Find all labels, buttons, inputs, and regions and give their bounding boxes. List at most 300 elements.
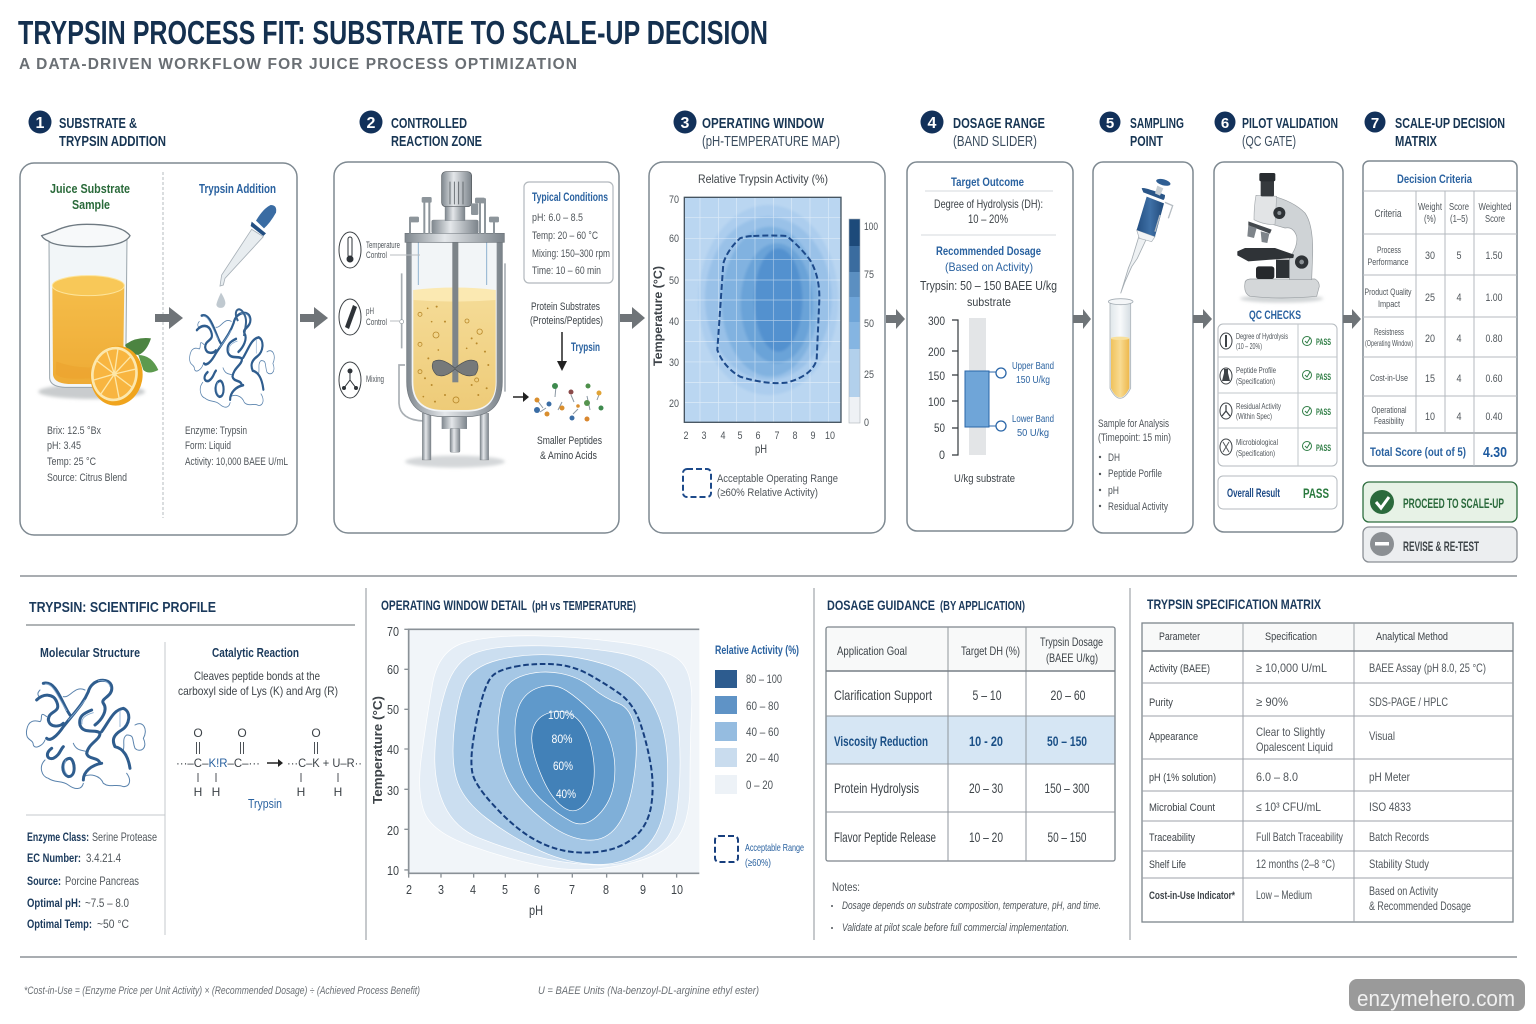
- enzyme facts: 3.4.21.4: [86, 851, 121, 865]
- spec row: cost-in-use indicator: Cost-in-Use Indicator*: [1149, 890, 1236, 902]
- icon: stirred reactor: [399, 172, 505, 468]
- juice substrate heading: [50, 181, 130, 212]
- matrix row: process performance: 5: [1456, 250, 1462, 262]
- legend: acceptable range: (≥60%): [745, 857, 771, 869]
- juice substrate heading: Sample: [72, 197, 110, 212]
- sample measurement list: DH: [1108, 452, 1120, 464]
- legend: relative activity: Relative Activity (%): [715, 643, 799, 657]
- spec row: appearance: Clear to Slightly: [1256, 725, 1325, 739]
- color bar legend: 50: [864, 318, 874, 330]
- matrix row: process performance: Performance: [1368, 257, 1408, 267]
- specification header row: Specification: [1265, 631, 1317, 643]
- operating window detail heading: OPERATING WINDOW DETAIL: [381, 597, 527, 613]
- spec row: shelf life: Stability Study: [1369, 857, 1429, 871]
- enzyme facts: Enzyme Class:: [27, 830, 89, 844]
- spec row: microbial count: [1149, 800, 1411, 814]
- spec row: shelf life: 12 months (2–8 °C): [1256, 857, 1335, 871]
- button: revise and re-test: REVISE & RE-TEST: [1403, 538, 1479, 554]
- y axis labels: 40: [387, 742, 399, 757]
- sample measurement list: [1099, 452, 1168, 513]
- button: proceed to scale-up: [1363, 482, 1517, 522]
- arrow: step 5 to 6: [1193, 309, 1212, 329]
- matrix row: product quality: Impact: [1378, 299, 1400, 309]
- dosage band slider: 200: [928, 345, 945, 359]
- reaction scheme: Trypsin: [248, 797, 282, 811]
- QC row: degree of hydrolysis: Degree of Hydrolysis: [1236, 332, 1288, 341]
- band labels: 150 U/kg: [1016, 375, 1050, 386]
- matrix row: product quality: [1364, 287, 1502, 309]
- notes: Notes:: [832, 880, 860, 894]
- x axis labels: 2: [406, 882, 412, 897]
- x axis labels: [684, 430, 835, 456]
- dosage row: protein hydrolysis: [834, 780, 1090, 796]
- color bar legend: 75: [864, 269, 874, 281]
- matrix row: resistance: 20: [1425, 333, 1435, 345]
- dosage row: flavor peptide release: 10 – 20: [969, 829, 1003, 845]
- spec row: purity: SDS-PAGE / HPLC: [1369, 695, 1448, 709]
- matrix row: operational feasibility: [1372, 405, 1502, 426]
- matrix row: operational feasibility: Feasibility: [1374, 416, 1404, 426]
- enzyme attributes text: Form: Liquid: [185, 440, 231, 452]
- y axis labels: 60: [387, 662, 399, 677]
- x axis labels: 3: [702, 430, 706, 442]
- spec row: traceability: Traceability: [1149, 832, 1195, 844]
- x axis labels: 9: [640, 882, 646, 897]
- target outcome text: [921, 175, 1056, 235]
- molecular structure heading: Molecular Structure: [40, 645, 140, 660]
- color bar legend: 25: [864, 369, 874, 381]
- spec row: activity: [1149, 661, 1486, 675]
- spec row: purity: Purity: [1149, 697, 1173, 709]
- matrix header row: (1–5): [1450, 214, 1468, 225]
- reaction scheme: O: [237, 726, 247, 740]
- legend: acceptable range: [715, 836, 804, 869]
- catalytic reaction heading: Catalytic Reaction: [212, 645, 299, 660]
- matrix row: operational feasibility: 4: [1456, 411, 1462, 423]
- arrow: step 3 to 4: [886, 309, 905, 329]
- reaction scheme: O: [311, 726, 321, 740]
- matrix row: process performance: 1.50: [1486, 250, 1502, 262]
- notes: Validate at pilot scale before full commercial implementation.: [842, 922, 1069, 934]
- QC row: residual activity: (Within Spec): [1236, 412, 1272, 421]
- typical conditions box: Mixing: 150–300 rpm: [532, 248, 610, 260]
- spec row: pH: pH (1% solution): [1149, 772, 1216, 784]
- recommended dosage text: Trypsin: 50 – 150 BAEE U/kg: [920, 278, 1057, 293]
- matrix row: resistance: 4: [1456, 333, 1462, 345]
- step 6 heading: 6: [1221, 115, 1229, 132]
- y axis labels: Temperature (°C): [370, 696, 385, 804]
- step 7 heading: 7: [1371, 115, 1379, 132]
- panel: scientific profile: [26, 599, 362, 935]
- reaction scheme: [176, 726, 362, 811]
- typical conditions box: pH: 6.0 – 8.5: [532, 212, 583, 224]
- step 1 heading: [28, 110, 166, 150]
- step 2 heading: CONTROLLED: [391, 115, 467, 132]
- y axis labels: 40: [669, 316, 679, 328]
- x axis labels: 3: [438, 882, 444, 897]
- enzyme facts: Serine Protease: [92, 830, 157, 844]
- icon: molecular ribbon: [26, 680, 145, 789]
- icon: pH control: [339, 299, 400, 335]
- spec row: cost-in-use indicator: & Recommended Dosage: [1369, 899, 1471, 913]
- matrix row: product quality: 4: [1456, 292, 1462, 304]
- matrix header row: (%): [1424, 214, 1436, 225]
- juice attributes text: [47, 425, 127, 484]
- matrix row: resistance: (Operating Window): [1365, 339, 1413, 348]
- icon: temperature control: [339, 232, 420, 268]
- title: TRYPSIN PROCESS FIT: SUBSTRATE TO SCALE-UP DECISION: [18, 14, 768, 51]
- y axis labels: 20: [669, 398, 679, 410]
- reaction scheme: ···C–K + U–R··: [287, 756, 362, 770]
- dosage row: viscosity reduction highlighted: [834, 733, 1087, 749]
- matrix row: process performance: Process: [1377, 245, 1401, 255]
- y axis labels: 70: [387, 624, 399, 639]
- sample text: [1098, 418, 1171, 444]
- y axis labels: 10: [387, 863, 399, 878]
- panel: sampling point: [1093, 162, 1193, 533]
- sample measurement list: Peptide Porfile: [1108, 468, 1162, 480]
- spec row: activity: Activity (BAEE): [1149, 663, 1210, 675]
- x axis labels: 6: [756, 430, 760, 442]
- dosage header row: Trypsin Dosage: [1040, 635, 1103, 649]
- enzyme facts: Optimal pH:: [27, 896, 81, 910]
- x axis labels: 9: [810, 430, 816, 442]
- smaller peptides label: [537, 435, 602, 462]
- notes: [831, 880, 1101, 934]
- typical conditions box: [524, 182, 613, 283]
- spec row: traceability: Full Batch Traceability: [1256, 830, 1343, 844]
- icon: pH control: pH: [366, 306, 374, 316]
- step 5 heading: 5: [1106, 115, 1114, 132]
- QC row: peptide profile: (Specification): [1236, 377, 1275, 386]
- enzyme attributes text: Enzyme: Trypsin: [185, 425, 247, 437]
- enzyme attributes text: [185, 425, 288, 468]
- matrix header row: Criteria: [1374, 208, 1402, 220]
- matrix row: resistance: Resistness: [1374, 327, 1404, 337]
- smaller peptides label: Smaller Peptides: [537, 435, 602, 447]
- contour labels: [548, 708, 576, 801]
- dosage row: clarification support: 5 – 10: [972, 687, 1002, 703]
- matrix row: product quality: Product Quality: [1364, 287, 1412, 297]
- recommended dosage text: (Based on Activity): [945, 260, 1033, 274]
- trypsin addition heading: Trypsin Addition: [199, 181, 276, 196]
- spec row: pH: pH Meter: [1369, 770, 1410, 784]
- y axis labels: Temperature (°C): [653, 266, 665, 366]
- icon: smaller peptides: [534, 383, 604, 422]
- QC checks table: [1218, 324, 1337, 466]
- spec row: microbial count: Microbial Count: [1149, 802, 1215, 814]
- step 2 heading: [360, 110, 482, 150]
- step 1 heading: 1: [36, 115, 45, 132]
- color bar legend: 100: [864, 221, 878, 233]
- enzyme facts: EC Number:: [27, 851, 81, 865]
- enzyme facts: ~50 °C: [97, 917, 129, 931]
- matrix row: resistance: 0.80: [1486, 333, 1502, 345]
- icon: dropper: [216, 205, 276, 308]
- panel: specification matrix: [1142, 596, 1513, 922]
- spec row: cost-in-use indicator: Low – Medium: [1256, 888, 1312, 902]
- panel: operating window: [649, 162, 885, 533]
- step 3 heading: (pH-TEMPERATURE MAP): [702, 133, 840, 150]
- reaction scheme: ···–C–K!R–C–···: [176, 756, 260, 770]
- QC row: microbiological: (Specification): [1236, 449, 1275, 458]
- dosage row: flavor peptide release: [834, 829, 1087, 845]
- contour labels: 100%: [548, 708, 574, 722]
- icon: temperature control: Control: [366, 250, 387, 260]
- reaction scheme: H: [194, 785, 202, 799]
- spec row: pH: 6.0 – 8.0: [1256, 770, 1298, 784]
- spec row: traceability: Batch Records: [1369, 830, 1429, 844]
- QC checks heading: QC CHECKS: [1249, 310, 1301, 322]
- spec row: purity: [1149, 695, 1448, 709]
- decision criteria heading: Decision Criteria: [1397, 172, 1472, 186]
- x axis labels: 5: [738, 430, 742, 442]
- dosage row: viscosity reduction highlighted: Viscosity Reduction: [834, 733, 928, 749]
- enzyme facts: Optimal Temp:: [27, 917, 92, 931]
- spec row: cost-in-use indicator: [1149, 884, 1471, 913]
- unit label: U/kg substrate: [954, 473, 1015, 485]
- arrow: trypsin conversion: Trypsin: [571, 340, 600, 354]
- contour labels: 60%: [553, 759, 573, 773]
- step 1 heading: SUBSTRATE &: [59, 115, 137, 132]
- icon: temperature control: Temperature: [366, 240, 400, 250]
- legend: relative activity: [715, 643, 799, 794]
- matrix row: product quality: 25: [1425, 292, 1435, 304]
- legend: relative activity: 80 – 100: [746, 672, 782, 686]
- color bar legend: [849, 219, 878, 429]
- step 5 heading: POINT: [1130, 133, 1163, 150]
- step 2 heading: REACTION ZONE: [391, 133, 482, 150]
- step 4 heading: [920, 110, 1045, 150]
- x axis labels: 7: [774, 430, 780, 442]
- dosage band slider: 100: [928, 395, 945, 409]
- dosage header row: Application Goal: [837, 644, 907, 658]
- footnote: units: U = BAEE Units (Na-benzoyl-DL-arginine ethyl ester): [538, 985, 759, 997]
- target outcome text: 10 – 20%: [968, 212, 1008, 226]
- step 7 heading: [1364, 112, 1505, 150]
- total score: 4.30: [1483, 444, 1507, 461]
- matrix header row: Score: [1485, 214, 1505, 225]
- icon: trypsin protein ribbon: [190, 309, 274, 407]
- x axis labels: [406, 882, 683, 918]
- legend: acceptable operating range: Acceptable Operating Range: [717, 473, 838, 485]
- typical conditions box: Temp: 20 – 60 °C: [532, 230, 598, 242]
- recommended dosage text: Recommended Dosage: [936, 244, 1041, 258]
- band labels: 50 U/kg: [1017, 428, 1049, 439]
- matrix header row: Score: [1449, 202, 1469, 213]
- dosage row: clarification support: 20 – 60: [1050, 687, 1086, 703]
- matrix row: cost-in-use: 4: [1456, 373, 1462, 385]
- protein substrates label: [530, 301, 603, 327]
- step 6 heading: (QC GATE): [1242, 133, 1296, 150]
- sample text: (Timepoint: 15 min): [1098, 432, 1171, 444]
- step 3 heading: OPERATING WINDOW: [702, 115, 825, 132]
- spec row: traceability: [1149, 830, 1429, 844]
- x axis labels: 10: [671, 882, 683, 897]
- specification table: [1142, 623, 1513, 922]
- spec row: cost-in-use indicator: Based on Activity: [1369, 884, 1438, 898]
- reaction scheme: H: [297, 785, 305, 799]
- subtitle: A DATA-DRIVEN WORKFLOW FOR JUICE PROCESS OPTIMIZATION: [19, 56, 577, 73]
- juice attributes text: Source: Citrus Blend: [47, 472, 127, 484]
- legend: acceptable range: Acceptable Range: [745, 842, 804, 854]
- x axis labels: 7: [569, 882, 575, 897]
- QC row: microbiological: Microbiological: [1236, 438, 1278, 447]
- target outcome text: Target Outcome: [951, 175, 1024, 189]
- matrix row: process performance: [1368, 245, 1502, 267]
- step 5 heading: [1100, 112, 1184, 150]
- sample measurement list: pH: [1108, 485, 1119, 497]
- step 6 heading: PILOT VALIDATION: [1242, 115, 1338, 132]
- spec row: activity: ≥ 10,000 U/mL: [1256, 661, 1327, 675]
- arrow: step 2 to 3: [620, 307, 645, 329]
- specification heading: TRYPSIN SPECIFICATION MATRIX: [1147, 596, 1322, 612]
- y axis labels: [653, 194, 679, 410]
- y axis labels: 30: [387, 783, 399, 798]
- legend: relative activity: 60 – 80: [746, 699, 779, 713]
- target outcome text: Degree of Hydrolysis (DH):: [934, 197, 1043, 211]
- icon: mixing: [339, 362, 384, 398]
- y axis labels: 50: [387, 702, 399, 717]
- matrix row: operational feasibility: 10: [1425, 411, 1435, 423]
- dosage band slider: 150: [928, 369, 945, 383]
- spec row: appearance: Appearance: [1149, 731, 1198, 743]
- specification header row: Parameter: [1159, 631, 1200, 643]
- catalytic reaction description: Cleaves peptide bonds at the: [194, 669, 320, 683]
- sample text: Sample for Analysis: [1098, 418, 1169, 430]
- enzyme facts: ~7.5 – 8.0: [85, 896, 129, 910]
- QC row: residual activity: PASS: [1316, 407, 1331, 418]
- icon: test tube: [1108, 299, 1133, 398]
- spec row: shelf life: [1149, 857, 1429, 871]
- QC row: peptide profile: [1220, 366, 1331, 386]
- icon: mixing: Mixing: [366, 374, 384, 384]
- panel: substrate and trypsin addition: [20, 163, 297, 535]
- QC row: microbiological: [1220, 438, 1331, 458]
- band labels: Lower Band: [1012, 414, 1054, 425]
- scientific profile heading: TRYPSIN: SCIENTIFIC PROFILE: [29, 599, 216, 616]
- enzyme facts: [27, 830, 157, 931]
- protein substrates label: Protein Substrates: [531, 301, 600, 313]
- matrix row: cost-in-use: 0.60: [1486, 373, 1502, 385]
- arrow: substrate to trypsin: [155, 307, 183, 329]
- button: revise and re-test: [1363, 527, 1517, 562]
- y axis labels: 70: [669, 194, 679, 206]
- juice attributes text: pH: 3.45: [47, 440, 81, 452]
- panel: dosage guidance: [826, 597, 1115, 934]
- matrix row: resistance: [1365, 327, 1502, 348]
- legend: acceptable operating range: (≥60% Relative Activity): [717, 487, 818, 499]
- step 4 heading: DOSAGE RANGE: [953, 115, 1045, 132]
- matrix row: operational feasibility: 0.40: [1486, 411, 1502, 423]
- x axis labels: 2: [684, 430, 688, 442]
- matrix row: cost-in-use: Cost-in-Use: [1370, 373, 1408, 383]
- y axis labels: 50: [669, 275, 679, 287]
- matrix row: cost-in-use: [1370, 373, 1502, 385]
- panel: decision matrix: [1363, 161, 1517, 466]
- arrow: reactor to peptides: [513, 392, 529, 402]
- matrix row: product quality: 1.00: [1486, 292, 1502, 304]
- step 2 heading: 2: [367, 115, 376, 132]
- x axis labels: 6: [534, 882, 540, 897]
- contour chart: [404, 629, 699, 878]
- dosage band slider: [928, 314, 1006, 462]
- dosage row: clarification support: Clarification Support: [834, 687, 932, 703]
- protein substrates label: (Proteins/Peptides): [530, 315, 603, 327]
- overall result: Overall Result: [1227, 488, 1280, 500]
- chart title: Relative Trypsin Activity (%): [698, 172, 828, 186]
- color bar legend: 0: [864, 417, 869, 429]
- step 3 heading: 3: [681, 115, 690, 132]
- notes: Dosage depends on substrate composition, temperature, pH, and time.: [842, 900, 1101, 912]
- x axis labels: pH: [755, 442, 767, 456]
- step 4 heading: 4: [928, 115, 937, 132]
- x axis labels: pH: [529, 902, 543, 918]
- specification header row: Analytical Method: [1376, 631, 1448, 643]
- dosage row: flavor peptide release: 50 – 150: [1048, 829, 1087, 845]
- recommended dosage text: [920, 244, 1057, 309]
- band labels: Upper Band: [1012, 361, 1054, 372]
- x axis labels: 10: [825, 430, 835, 442]
- enzyme facts: Source:: [27, 874, 61, 888]
- typical conditions box: Time: 10 – 60 min: [532, 265, 601, 277]
- dosage table: [826, 627, 1115, 861]
- QC row: peptide profile: PASS: [1316, 372, 1331, 383]
- matrix row: operational feasibility: Operational: [1372, 405, 1406, 415]
- catalytic reaction description: [178, 669, 338, 698]
- dosage row: flavor peptide release: Flavor Peptide Release: [834, 829, 936, 845]
- spec row: microbial count: ≤ 10³ CFU/mL: [1256, 800, 1321, 814]
- spec row: appearance: [1149, 725, 1395, 754]
- dosage band slider: 300: [928, 314, 945, 328]
- dosage row: clarification support: [834, 687, 1086, 703]
- matrix header row: Weighted: [1478, 202, 1512, 213]
- heatmap chart: [684, 197, 841, 422]
- dosage header row: [837, 635, 1103, 665]
- matrix header row: Weight: [1418, 202, 1442, 213]
- x axis labels: 4: [470, 882, 476, 897]
- x axis labels: 4: [720, 430, 726, 442]
- dosage header row: (BAEE U/kg): [1046, 651, 1098, 665]
- step 1 heading: TRYPSIN ADDITION: [59, 133, 166, 150]
- icon: pH control: Control: [366, 317, 387, 327]
- QC row: peptide profile: Peptide Profile: [1236, 366, 1276, 375]
- dosage header row: Target DH (%): [961, 644, 1020, 658]
- typical conditions box: Typical Conditions: [532, 190, 608, 204]
- arrow: step 1 to 2: [300, 307, 328, 329]
- enzyme attributes text: Activity: 10,000 BAEE U/mL: [185, 456, 288, 468]
- panel: operating window detail: [370, 597, 804, 918]
- legend: relative activity: 20 – 40: [746, 751, 779, 765]
- y axis labels: [370, 624, 399, 878]
- juice attributes text: Temp: 25 °C: [47, 456, 96, 468]
- x axis labels: 5: [502, 882, 508, 897]
- QC row: residual activity: Residual Activity: [1236, 402, 1281, 411]
- dosage row: viscosity reduction highlighted: 10 - 20: [969, 733, 1003, 749]
- y axis labels: 20: [387, 823, 399, 838]
- recommended dosage text: substrate: [967, 295, 1011, 309]
- QC row: degree of hydrolysis: [1220, 332, 1331, 351]
- dosage row: protein hydrolysis: 20 – 30: [969, 780, 1003, 796]
- dosage band slider: 0: [939, 448, 945, 462]
- juice attributes text: Brix: 12.5 °Bx: [47, 425, 101, 437]
- dosage guidance heading: (BY APPLICATION): [940, 598, 1025, 613]
- step 3 heading: [674, 110, 840, 150]
- contour labels: 40%: [556, 787, 576, 801]
- arrow: step 4 to 5: [1073, 309, 1091, 329]
- watermark: enzymehero.com: [1357, 986, 1515, 1011]
- step 6 heading: [1214, 112, 1338, 150]
